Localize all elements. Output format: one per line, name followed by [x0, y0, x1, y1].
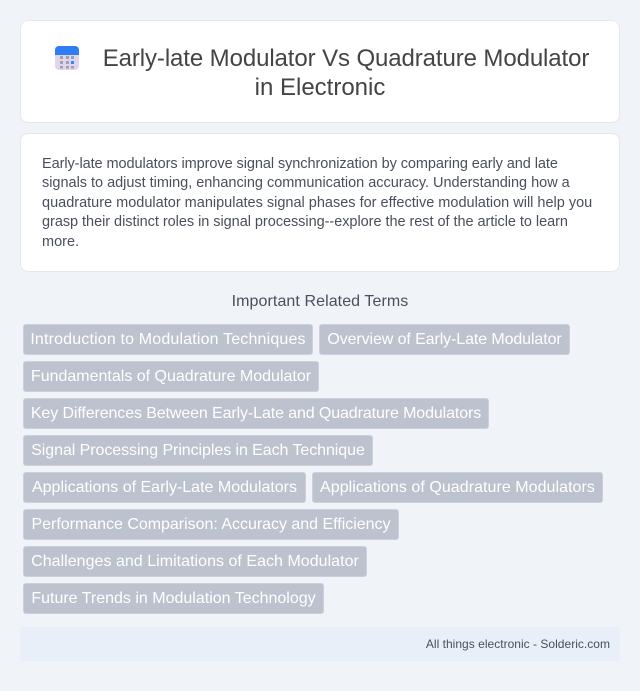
summary text: signals to adjust timing, enhancing communication accuracy. Understanding how a: [42, 175, 570, 191]
tag: Applications of Quadrature Modulators: [320, 479, 595, 496]
panel: title card: [20, 20, 620, 123]
tag: [23, 472, 306, 503]
tag: Introduction to Modulation Techniques: [30, 331, 306, 348]
tag: Overview of Early-Late Modulator: [327, 331, 562, 348]
tag: Fundamentals of Quadrature Modulator: [31, 368, 311, 385]
title: in Electronic: [255, 74, 385, 101]
summary text: grasp their distinct roles in signal processing--explore the rest of the article to learn: [42, 214, 568, 230]
heading: related terms: Important Related Terms: [232, 293, 408, 310]
tag: Performance Comparison: Accuracy and Efficiency: [32, 516, 390, 533]
icon: calendar: [55, 46, 79, 70]
tag: Key Differences Between Early-Late and Quadrature Modulators: [31, 405, 481, 422]
footer: All things electronic - Solderic.com: [426, 637, 610, 651]
title: [103, 45, 589, 101]
tag: [23, 398, 489, 429]
summary text: Early-late modulators improve signal synchronization by comparing early and late: [42, 156, 558, 172]
summary text: [42, 156, 592, 250]
summary text: quadrature modulator manipulates signal phases for effective modulation will help you: [42, 195, 592, 211]
tag: Future Trends in Modulation Technology: [31, 590, 316, 607]
tag list: [23, 324, 603, 614]
tag: Challenges and Limitations of Each Modulator: [31, 553, 359, 570]
panel: summary card: [20, 133, 620, 272]
title: Early-late Modulator Vs Quadrature Modulator: [103, 45, 589, 72]
tag: [312, 472, 603, 503]
tag: Applications of Early-Late Modulators: [32, 479, 297, 496]
tag: [23, 435, 373, 466]
summary text: more.: [42, 234, 79, 250]
tag: [319, 324, 570, 355]
tag: [23, 583, 324, 614]
tag: [23, 509, 399, 540]
tag: [23, 324, 313, 355]
tag: [23, 546, 367, 577]
tag: Signal Processing Principles in Each Technique: [31, 442, 365, 459]
footer: [20, 627, 620, 661]
tag: [23, 361, 319, 392]
